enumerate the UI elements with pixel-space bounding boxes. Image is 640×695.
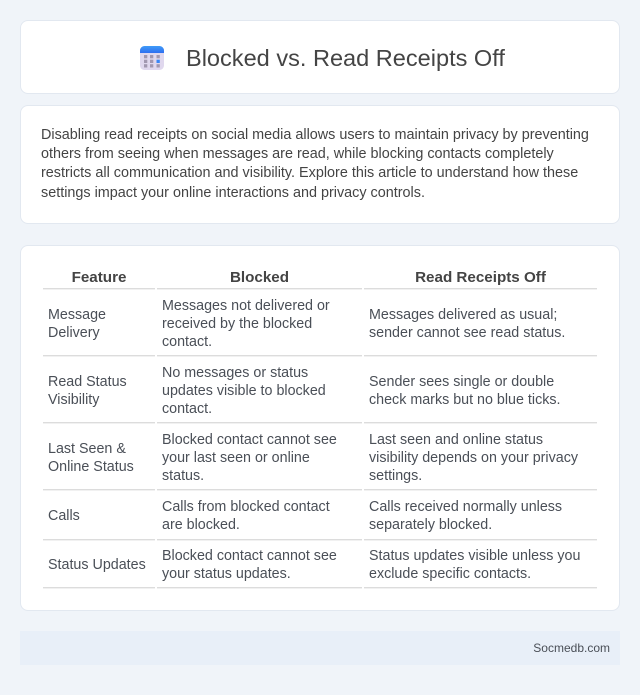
row: Last Seen: Online Status [48,459,134,475]
cell: visibility depends on your privacy [369,450,578,466]
row: Message Delivery: Message [48,307,106,323]
intro text: restricts all communication and visibility. Explore this article to understand how these [41,165,578,181]
cell: settings. [369,468,422,484]
row: Read Status Visibility [48,374,127,408]
cell [162,298,330,350]
intro text [41,127,589,201]
row: Last Seen: Last Seen & [48,441,126,457]
cell: Status updates visible unless you [369,548,580,564]
cell: No messages or status [162,365,308,381]
cell: check marks but no blue ticks. [369,392,561,408]
row: Read Status Visibility: Visibility [48,392,99,408]
footer bar [20,631,620,665]
intro text: Disabling read receipts on social media allows users to maintain privacy by preventing [41,127,589,143]
header: Read Receipts Off: Read Receipts Off [415,269,546,286]
title: Blocked vs. Read Receipts Off [186,45,505,71]
cell [369,548,580,582]
intro text: others from seeing when messages are read, while blocking contacts completely [41,146,554,162]
row: Status Updates: Status Updates [48,557,146,573]
cell: Last seen and online status [369,432,543,448]
cell [369,499,562,533]
cell: contact. [162,334,212,350]
cell: exclude specific contacts. [369,566,531,582]
footer text: Socmedb.com [533,641,610,655]
row: Message Delivery: Delivery [48,325,100,341]
cell: Blocked contact cannot see [162,548,337,564]
cell [369,374,561,408]
cell: received by the blocked [162,316,312,332]
row: Last Seen [48,441,134,475]
cell [162,365,326,417]
cell [162,432,337,484]
cell: contact. [162,401,212,417]
cell [162,548,337,582]
cell: are blocked. [162,517,240,533]
intro card [20,105,620,224]
cell [162,499,330,533]
row: Message Delivery [48,307,106,341]
icon: calendar [140,46,164,70]
cell: Messages delivered as usual; [369,307,557,323]
cell: your last seen or online [162,450,310,466]
cell: Calls from blocked contact [162,499,330,515]
cell: separately blocked. [369,517,492,533]
row: Read Status Visibility: Read Status [48,374,127,390]
cell: Sender sees single or double [369,374,554,390]
table card [20,245,620,611]
header: Feature: Feature [72,269,126,286]
cell [369,307,565,341]
cell: your status updates. [162,566,291,582]
intro text: settings impact your online interactions and privacy controls. [41,185,425,201]
cell: updates visible to blocked [162,383,326,399]
header: Blocked: Blocked [230,269,289,286]
cell [369,432,578,484]
cell: Calls received normally unless [369,499,562,515]
row: Calls: Calls [48,508,80,524]
cell: sender cannot see read status. [369,325,565,341]
cell: Blocked contact cannot see [162,432,337,448]
cell: Messages not delivered or [162,298,330,314]
title card [20,20,620,94]
cell: status. [162,468,204,484]
